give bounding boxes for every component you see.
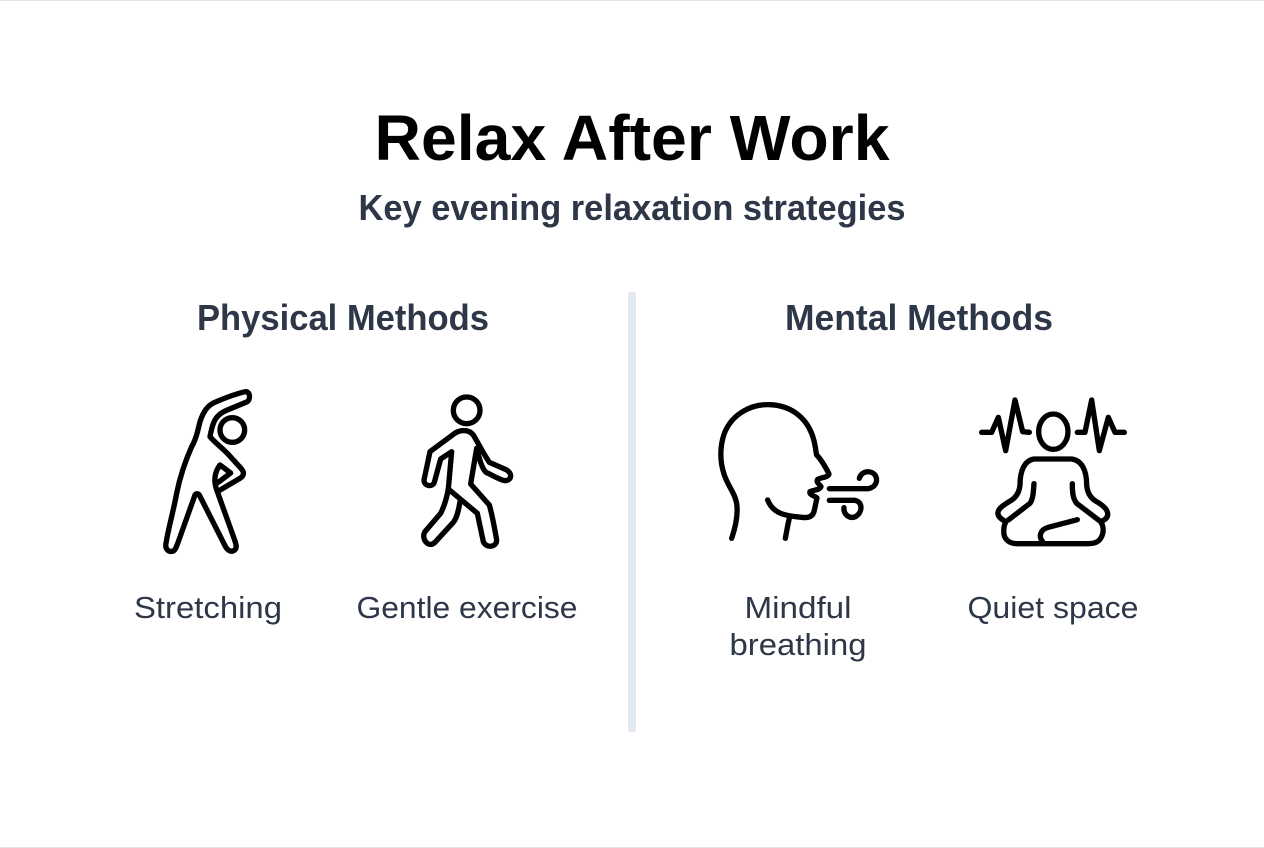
label: gentle exercise: Gentle exercise [356, 590, 578, 625]
icon: gentle exercise [424, 397, 511, 546]
heading: physical methods: Physical Methods [197, 297, 489, 338]
panel: physical methods [134, 297, 578, 625]
label: mindful breathing: Mindful [744, 590, 852, 625]
panel: mental methods [721, 297, 1138, 662]
label: mindful breathing: breathing [730, 627, 866, 662]
label: mindful breathing [730, 590, 866, 662]
heading: mental methods: Mental Methods [785, 297, 1053, 338]
icon: quiet space [982, 400, 1124, 544]
label: stretching: Stretching [134, 590, 282, 625]
subtitle: Key evening relaxation strategies [358, 187, 906, 228]
title: Relax After Work [374, 102, 890, 174]
icon: mindful breathing [721, 405, 877, 538]
icon: stretching [166, 392, 250, 551]
center divider [628, 292, 636, 732]
label: quiet space: Quiet space [968, 590, 1138, 625]
